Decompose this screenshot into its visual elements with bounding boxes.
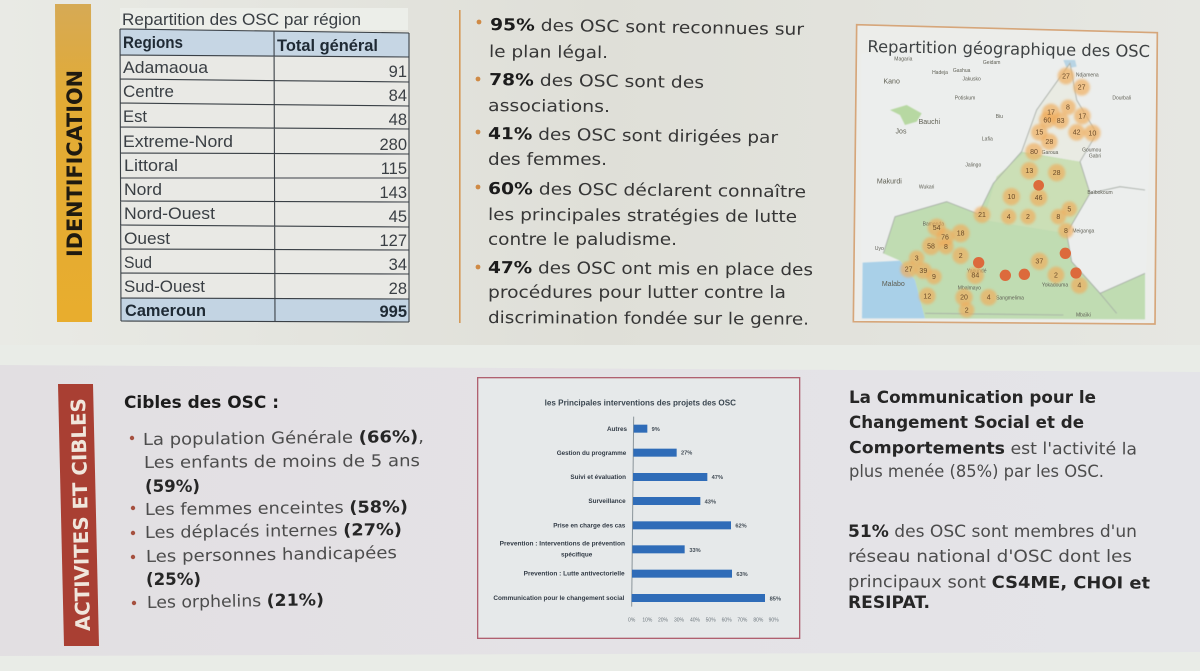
network membership text block (848, 522, 1150, 612)
communication text block: Changement Social et de (849, 413, 1084, 432)
table: répartition des OSC par région (120, 8, 409, 322)
map clusters: 10 (1088, 130, 1096, 137)
map place names: Yokadouma (1042, 283, 1068, 289)
key figures list: des femmes. (488, 150, 607, 169)
key figures list: 47% des OSC ont mis en place des (488, 258, 813, 279)
key figures list: discrimination fondée sur le genre. (488, 308, 809, 329)
table rows: Littoral (124, 157, 178, 175)
x axis labels: 20% (658, 617, 669, 623)
map clusters: 37 (1035, 259, 1043, 266)
table rows: Extreme-Nord (123, 133, 233, 151)
table rows: 28 (389, 280, 407, 298)
map clusters: 18 (957, 231, 965, 238)
map clusters: 2 (1026, 214, 1030, 221)
table rows: Nord-Ouest (124, 205, 215, 223)
map place names: Baïbokoum (1087, 190, 1113, 196)
network membership text block: réseau national d'OSC dont les (848, 547, 1132, 566)
map place names: Mbaïki (1076, 313, 1091, 319)
table rows: 48 (389, 111, 407, 129)
x axis labels: 30% (674, 617, 685, 623)
network membership text block: principaux sont CS4ME, CHOI et (848, 572, 1150, 593)
targets list (130, 427, 424, 612)
map clusters: 21 (978, 212, 986, 219)
bars (632, 425, 765, 602)
neighbouring green land (890, 105, 922, 125)
map clusters: 8 (944, 244, 948, 251)
map clusters: 46 (1035, 195, 1043, 202)
communication text block: Comportements est l'activité la (849, 438, 1137, 459)
map clusters: 12 (923, 293, 931, 300)
table rows: 84 (389, 87, 407, 105)
table rows: Centre (123, 83, 174, 101)
sea (862, 261, 925, 318)
value labels: 62% (735, 524, 747, 530)
key figures list: le plan légal. (489, 42, 608, 62)
table rows: 45 (389, 208, 407, 226)
table rows: 34 (389, 256, 407, 274)
section label: activités et cibles (58, 384, 99, 646)
key figures list: 41% des OSC sont dirigées par (488, 124, 778, 147)
section label: identification (55, 4, 92, 322)
category labels: Communication pour le changement social (493, 595, 625, 602)
table rows: Nord (124, 181, 162, 199)
map clusters: 27 (1062, 73, 1070, 80)
map: répartition géographique des OSC (852, 24, 1158, 325)
category labels (493, 426, 627, 602)
map place names: Uyo (875, 246, 884, 252)
key figures list (476, 15, 813, 329)
map clusters: 2 (1054, 272, 1058, 279)
map clusters: 80 (1030, 149, 1038, 156)
x axis labels: 0% (628, 617, 636, 623)
key figures list: les principales stratégies de lutte (488, 205, 797, 226)
value labels: 43% (705, 499, 716, 505)
table rows: Sud (124, 254, 152, 272)
x axis labels: 60% (722, 617, 732, 623)
targets list: Les enfants de moins de 5 ans (144, 451, 420, 472)
map clusters: 76 (941, 235, 949, 242)
targets list: (59%) (145, 477, 200, 496)
key figures list: 78% des OSC sont des (489, 70, 704, 92)
map clusters: 2 (959, 253, 963, 260)
map clusters (900, 68, 1101, 318)
map place names: Kano (883, 78, 900, 85)
table rows: 115 (381, 160, 407, 178)
map place names: Sangmelima (996, 295, 1024, 301)
panel: activités et cibles (58, 378, 1150, 646)
map place names: Potiskum (955, 95, 975, 101)
table rows: Sud-Ouest (124, 278, 205, 296)
category labels: Surveillance (588, 498, 626, 505)
key figures list: 95% des OSC sont reconnues sur (490, 15, 804, 39)
table rows: Est (123, 108, 147, 126)
map place names: Jakusko (962, 77, 981, 83)
section label: identification: IDENTIFICATION (63, 70, 87, 257)
map place names: Bamenda (923, 221, 944, 227)
communication text block: La Communication pour le (849, 388, 1096, 407)
value labels (652, 427, 781, 603)
map place names: Goumou (1082, 148, 1101, 154)
targets list: Les déplacés internes (27%) (145, 520, 402, 542)
communication text block (849, 388, 1137, 481)
map clusters: 10 (1007, 194, 1015, 201)
bar chart: principales interventions (477, 377, 800, 639)
map clusters: 8 (1064, 228, 1068, 235)
map place names: Bauchi (919, 119, 940, 126)
targets list: La population Générale (66%) , (143, 427, 424, 449)
value labels: 27% (681, 451, 692, 457)
key figures list: procédures pour lutter contre la (488, 283, 786, 302)
Cameroon territory (883, 152, 1145, 319)
map place names: Jalingo (965, 163, 981, 169)
map clusters: 8 (1066, 105, 1070, 112)
map clusters: 2 (965, 307, 969, 314)
value labels: 9% (652, 427, 660, 433)
map clusters: 39 (919, 268, 927, 275)
table rows: Cameroun (125, 302, 206, 320)
map clusters: 84 (971, 273, 979, 280)
table rows: 995 (379, 303, 407, 321)
targets list: Les femmes enceintes (58%) (145, 497, 408, 519)
x axis labels: 80% (753, 617, 764, 623)
targets list: Les personnes handicapées (146, 543, 397, 566)
map place names: Ndjamena (1076, 73, 1099, 79)
map place names: Mbalmayo (958, 285, 981, 291)
table title: Repartition des OSC par région (122, 11, 361, 29)
value labels: 63% (736, 572, 748, 578)
map clusters: 27 (905, 267, 913, 274)
map place names (875, 57, 1131, 319)
map clusters: 17 (1078, 113, 1086, 120)
map place names: Lafia (982, 137, 993, 143)
map clusters: 28 (1045, 139, 1053, 146)
map clusters: 4 (987, 295, 991, 302)
table rows: Regions (123, 34, 183, 52)
map place names: Meiganga (1072, 229, 1095, 235)
network membership text block: RESIPAT. (848, 593, 930, 612)
map clusters: 58 (927, 243, 935, 250)
x axis labels: 90% (769, 617, 779, 623)
map place names: Jos (896, 128, 907, 135)
category labels: spécifique (561, 551, 593, 558)
map clusters: 83 (1057, 118, 1065, 125)
map clusters: 17 (1047, 110, 1055, 117)
key figures list: 60% des OSC déclarent connaître (488, 179, 806, 201)
map clusters: 5 (1067, 206, 1071, 213)
x axis labels: 40% (690, 617, 701, 623)
map place names: Wukari (919, 185, 934, 191)
category labels: Prevention : Lutte antivectorielle (524, 571, 625, 578)
targets heading: Cibles des OSC : (124, 393, 279, 412)
communication text block: plus menée (85%) par les OSC. (849, 462, 1104, 481)
category labels: Prevention : Interventions de prévention (500, 541, 625, 548)
map place names: Malabo (882, 281, 905, 288)
table rows: Total général (277, 37, 378, 55)
value labels: 33% (689, 548, 701, 554)
map clusters: 60 (1043, 117, 1051, 124)
table rows (123, 34, 407, 321)
category labels: Prise en charge des cas (553, 522, 626, 529)
x axis labels: 10% (642, 617, 653, 623)
divider line (459, 10, 461, 323)
table rows: 127 (379, 232, 407, 250)
map place names: Biu (996, 114, 1003, 120)
table rows: 143 (379, 184, 407, 202)
map place names: Gashua (953, 68, 971, 74)
key figures list: contre le paludisme. (488, 230, 677, 249)
targets list: Les orphelins (21%) (147, 590, 324, 612)
map title: Repartition géographique des OSC (867, 37, 1150, 61)
map clusters: 15 (1035, 130, 1043, 137)
map place names: Dourbali (1112, 95, 1131, 101)
map clusters: 54 (933, 225, 941, 232)
map clusters: 13 (1025, 168, 1033, 175)
category labels: Suivi et évaluation (570, 474, 626, 481)
panel: identification (55, 4, 1157, 329)
map clusters: 4 (1077, 283, 1081, 290)
map clusters: 27 (1078, 85, 1086, 92)
targets list: (25%) (146, 570, 201, 589)
value labels: 85% (770, 597, 781, 603)
map place names: Gabri (1089, 153, 1101, 159)
map place names: Yaoundé (967, 269, 987, 275)
map clusters: 3 (915, 255, 919, 262)
table rows: 280 (379, 136, 407, 154)
table rows: 91 (389, 63, 407, 81)
table rows: Ouest (124, 230, 170, 248)
x axis labels (628, 617, 779, 623)
section label: activités et cibles: ACTIVITES ET CIBLES (66, 398, 95, 631)
map place names: Magaria (894, 57, 913, 63)
map place names: Garoua (1042, 150, 1059, 156)
map place names: Makurdi (877, 178, 902, 185)
map clusters: 4 (1007, 214, 1011, 221)
chart title: les Principales interventions des projets des OSC (545, 399, 736, 408)
map place names: Geidam (983, 60, 1000, 66)
category labels: Gestion du programme (557, 450, 627, 457)
value labels: 47% (712, 475, 723, 481)
map place names: Hadeja (932, 70, 948, 76)
key figures list: associations. (488, 96, 610, 116)
map clusters: 20 (960, 295, 968, 302)
network membership text block: 51% des OSC sont membres d'un (848, 522, 1137, 541)
map clusters: 28 (1053, 170, 1061, 177)
x axis labels: 70% (737, 617, 748, 623)
map clusters: 42 (1073, 130, 1081, 137)
map clusters: 9 (932, 274, 936, 281)
map clusters: 8 (1056, 214, 1060, 221)
table rows: Adamaoua (123, 59, 209, 77)
x axis labels: 50% (706, 617, 716, 623)
category labels: Autres (607, 426, 627, 433)
